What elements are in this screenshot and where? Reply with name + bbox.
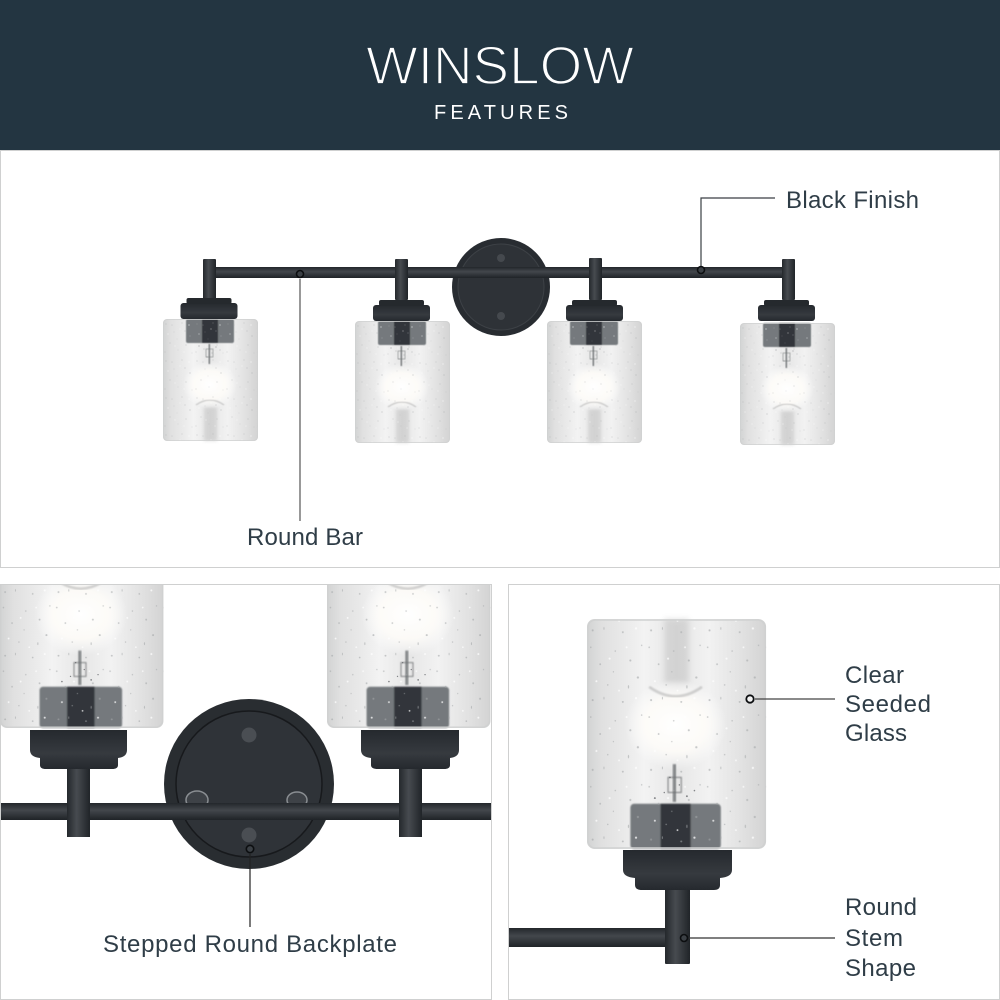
callout: Round Stem Shape: Shape <box>845 955 916 982</box>
callout: Clear Seeded Glass: Glass <box>845 720 907 747</box>
glass shade 3 <box>547 300 642 443</box>
panel: backplate detail <box>0 584 492 1000</box>
callout: Stepped Round Backplate: Stepped Round Backplate <box>103 931 397 958</box>
round bar <box>209 267 789 278</box>
glass shade 1 <box>163 298 258 441</box>
glass shade 2 <box>355 300 450 443</box>
left holder <box>30 730 127 837</box>
left glass shade <box>1 585 164 730</box>
stems <box>203 258 795 300</box>
callout: Stepped Round Backplate <box>103 845 397 958</box>
callout: Black Finish: Black Finish <box>786 187 919 214</box>
stepped backplate <box>164 699 334 869</box>
header banner <box>0 0 1000 150</box>
horizontal bar <box>0 803 492 820</box>
callout: Clear Seeded Glass <box>746 662 931 747</box>
callout: Round Stem Shape: Round <box>845 894 917 921</box>
glass shade 4 <box>740 300 835 445</box>
backplate <box>452 238 550 336</box>
callout: Round Bar <box>247 270 363 551</box>
callout: Black Finish <box>698 187 919 274</box>
callout: Round Stem Shape <box>680 894 917 982</box>
title: WINSLOW <box>366 36 634 96</box>
callout: Clear Seeded Glass: Clear <box>845 662 904 689</box>
subtitle: FEATURES <box>434 102 568 124</box>
callout: Round Stem Shape: Stem <box>845 925 903 952</box>
callout: Round Bar: Round Bar <box>247 524 363 551</box>
right holder <box>361 730 459 837</box>
arm bar <box>508 928 668 947</box>
glass shade <box>587 619 766 849</box>
panel: glass detail <box>508 584 1000 1000</box>
callout: Clear Seeded Glass: Seeded <box>845 691 931 718</box>
panel: full fixture <box>0 150 1000 568</box>
right glass shade <box>327 585 490 730</box>
stem <box>665 885 690 964</box>
shade holder <box>623 850 732 890</box>
